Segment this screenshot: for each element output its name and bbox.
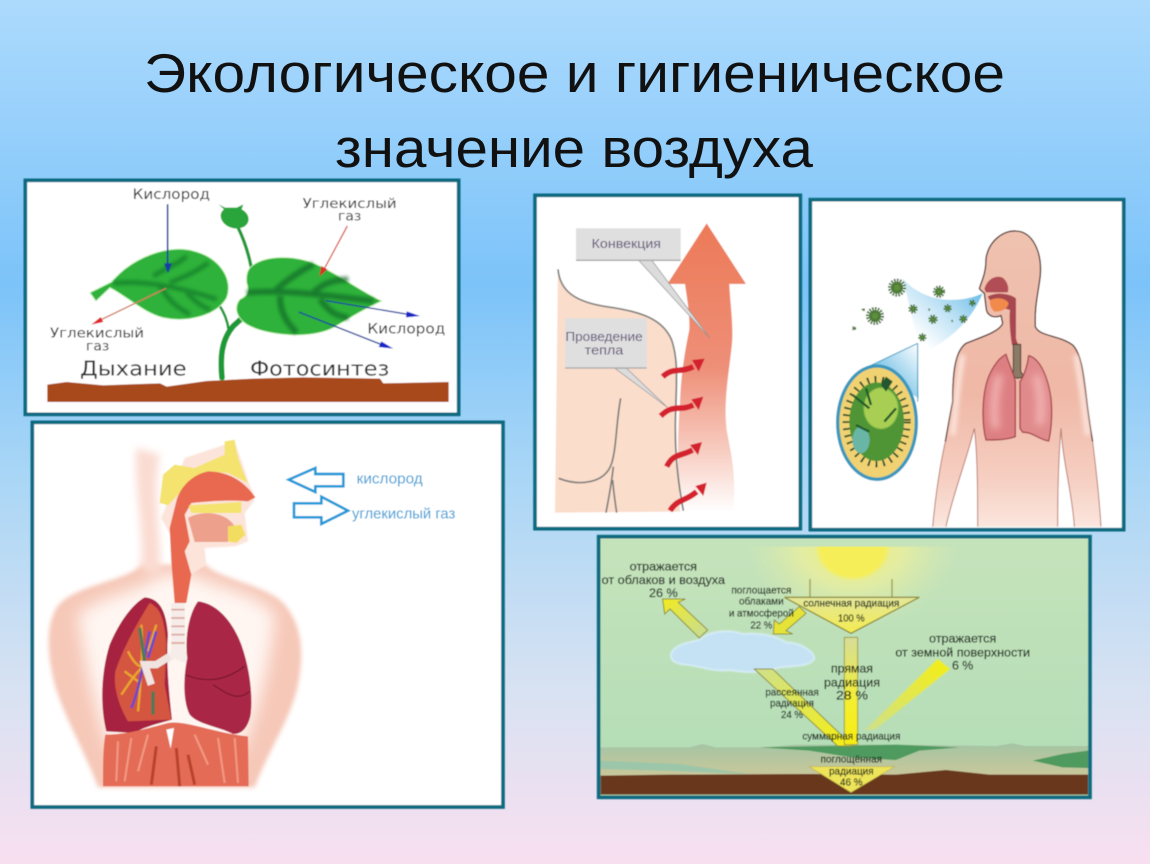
arrow: oxygen into left leaf [164, 204, 172, 273]
plant labels: газ [86, 339, 109, 354]
human torso [933, 231, 1101, 527]
right lung [184, 601, 251, 734]
radiation labels [602, 560, 1030, 789]
plant labels: Кислород [133, 187, 210, 203]
water streak [601, 761, 749, 774]
ground [601, 743, 1088, 776]
label: carbon dioxide: углекислый газ [352, 507, 456, 523]
panel: plant respiration and photosynthesis [25, 180, 459, 414]
dissected left lung [102, 597, 172, 733]
radiation labels: 24 % [781, 710, 803, 721]
arrow: carbon dioxide into right leaf [319, 226, 347, 277]
magnified pathogen [838, 343, 919, 479]
radiation labels: от облаков и воздуха [602, 574, 726, 587]
flower bud [219, 204, 249, 229]
plant stems [219, 226, 251, 378]
title: Экологическое и гигиеническое [144, 42, 1005, 104]
radiation labels: 28 % [836, 689, 868, 702]
torso skin [49, 441, 301, 787]
panel: airborne pathogens and respiratory system [810, 200, 1124, 530]
lung highlights [994, 375, 1041, 428]
airborne particles [853, 282, 974, 340]
radiation labels: 26 % [649, 587, 678, 600]
body outlines [558, 269, 683, 513]
radiation labels: радиация [770, 698, 814, 709]
sinus cavity [160, 440, 248, 505]
radiation labels: суммарная радиация [802, 731, 900, 742]
right leaf [237, 257, 382, 335]
radiation labels: и атмосферой [729, 609, 794, 620]
arrow: oxygen [289, 468, 343, 492]
sun [766, 546, 940, 597]
soil [601, 770, 1088, 795]
arrow: carbon dioxide out of left leaf [91, 288, 166, 325]
callout: convection: Конвекция [592, 237, 661, 251]
right lung fissures [185, 666, 250, 696]
radiation labels: солнечная радиация [803, 598, 899, 609]
arrow: absorbed radiation [809, 767, 894, 792]
left leaf veins [113, 256, 217, 314]
diaphragm [103, 722, 249, 786]
title [144, 42, 1005, 179]
radiation labels: 22 % [750, 620, 773, 631]
nasal cavity and throat [170, 471, 255, 603]
palate band [189, 502, 241, 513]
shoulder body [555, 270, 683, 513]
radiation labels: радиация [824, 676, 880, 689]
left lung [983, 354, 1015, 440]
mouth and tongue [188, 513, 235, 542]
callout: heat conduction [565, 318, 667, 407]
radiation labels: прямая [831, 663, 873, 676]
callout: heat conduction: Проведение [565, 330, 643, 344]
radiation labels: отражается [630, 560, 697, 573]
left leaf [90, 249, 228, 319]
soil [47, 377, 449, 402]
right leaf veins [247, 264, 373, 333]
radiation labels: от земной поверхности [895, 646, 1030, 659]
panel: human respiratory system [32, 422, 503, 807]
arrow: absorbed by clouds [773, 607, 806, 634]
right lung [1020, 356, 1052, 441]
arrow: reflected by clouds [663, 599, 708, 638]
plant labels: газ [338, 210, 361, 225]
radiation labels: облаками [739, 597, 784, 608]
title: значение воздуха [335, 117, 813, 179]
radiation labels: поглощённая [821, 754, 882, 765]
heat arrows [661, 359, 707, 511]
radiation labels: 46 % [840, 778, 863, 789]
trachea [1012, 344, 1024, 378]
plant labels: Дыхание [80, 356, 187, 380]
chin bone [228, 525, 245, 543]
arrow: diffuse radiation [754, 669, 853, 746]
arrow: oxygen out of right leaf [326, 301, 420, 317]
radiation labels: 6 % [952, 659, 973, 672]
label: oxygen: кислород [357, 472, 423, 488]
arrow: carbon dioxide [294, 497, 348, 524]
radiation labels: рассеянная [765, 687, 819, 698]
arrow: total solar radiation [784, 579, 919, 633]
plant labels: Углекислый [303, 197, 397, 212]
nasal and oral cavity [984, 277, 1019, 345]
radiation labels: радиация [829, 766, 874, 777]
vegetation [759, 745, 1088, 768]
panel: heat convection and conduction [535, 195, 800, 529]
arrow: oxygen out of right leaf lower [299, 312, 393, 349]
inhaled air stream [903, 278, 983, 354]
arrow: reflected by earth [864, 659, 950, 731]
plant labels [50, 187, 445, 380]
cloud [671, 631, 814, 672]
radiation labels: поглощается [731, 585, 791, 596]
callout: convection [576, 228, 710, 338]
plant labels: Фотосинтез [250, 356, 389, 380]
callout: heat conduction: тепла [585, 343, 624, 357]
plant labels: Углекислый [50, 326, 144, 341]
radiation labels: отражается [929, 633, 996, 646]
convection arrow [667, 223, 746, 512]
panel: solar radiation balance [596, 534, 1093, 800]
arrow: direct radiation [844, 637, 858, 745]
plant labels: Кислород [367, 321, 445, 337]
radiation labels: 100 % [838, 613, 865, 624]
trachea [161, 603, 191, 665]
